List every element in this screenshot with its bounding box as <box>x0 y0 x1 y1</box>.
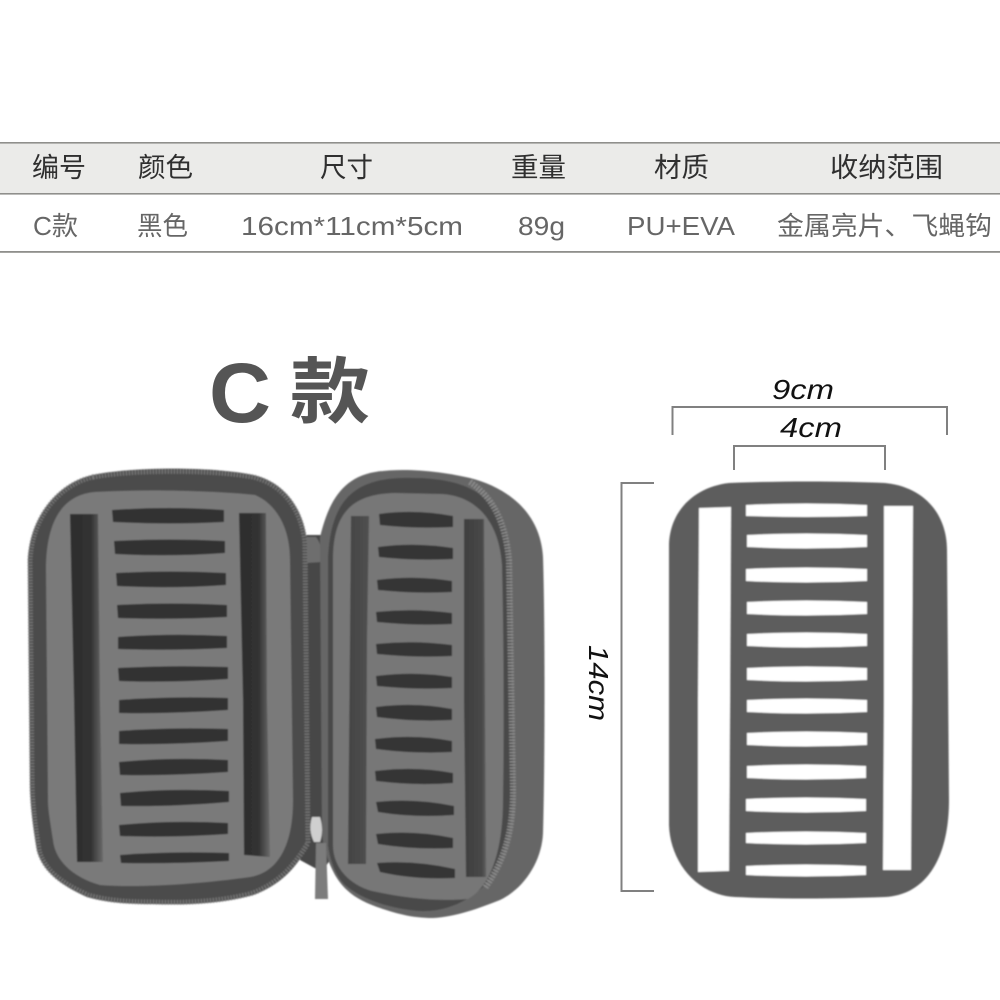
table header band: 重量 <box>511 153 566 183</box>
spec table <box>0 142 1000 253</box>
long slots <box>348 516 369 864</box>
zipper <box>328 478 513 911</box>
hinge tab <box>306 537 322 563</box>
table data row: 89g <box>518 211 565 241</box>
table data row: 黑色 <box>137 211 188 241</box>
table header band: 收纳范围 <box>830 153 943 183</box>
dimension: 9cm: 9cm <box>772 374 834 405</box>
table data row <box>33 211 992 241</box>
dimension: 9cm <box>672 374 947 435</box>
left case half <box>28 469 310 904</box>
table data row: C款 <box>33 211 78 241</box>
table data row: 16cm*11cm*5cm <box>241 211 463 241</box>
outer shell <box>320 470 544 918</box>
long slots <box>70 514 103 862</box>
right case half <box>320 470 544 918</box>
table data row: PU+EVA <box>627 211 736 241</box>
table data row: 金属亮片、飞蝇钩 <box>777 211 992 241</box>
dimension: 14cm <box>583 483 654 891</box>
hook slots <box>112 508 229 863</box>
table header band: 材质 <box>654 153 709 183</box>
photo: open fly case <box>28 469 544 918</box>
twelve hook slots <box>746 504 867 876</box>
dimension: 4cm <box>734 412 885 470</box>
hook slots <box>375 512 455 878</box>
table header band <box>0 142 1000 195</box>
foam insert <box>333 493 504 900</box>
zipper and shell <box>28 469 310 904</box>
gusset between halves <box>300 535 340 872</box>
table header band: 尺寸 <box>320 153 373 183</box>
side slots <box>698 507 731 872</box>
foam sheet <box>669 482 949 898</box>
heading: model C <box>209 346 370 440</box>
zipper pull <box>310 817 328 899</box>
foam insert <box>46 491 293 886</box>
foam insert cut-out diagram <box>583 374 949 898</box>
table header band: 颜色 <box>138 153 193 183</box>
dimension: 14cm: 14cm <box>583 645 614 721</box>
heading: model C: 款 <box>290 353 370 433</box>
table header band: 编号 <box>32 153 86 183</box>
dimension: 4cm: 4cm <box>780 412 842 443</box>
heading: model C: C <box>209 346 271 440</box>
